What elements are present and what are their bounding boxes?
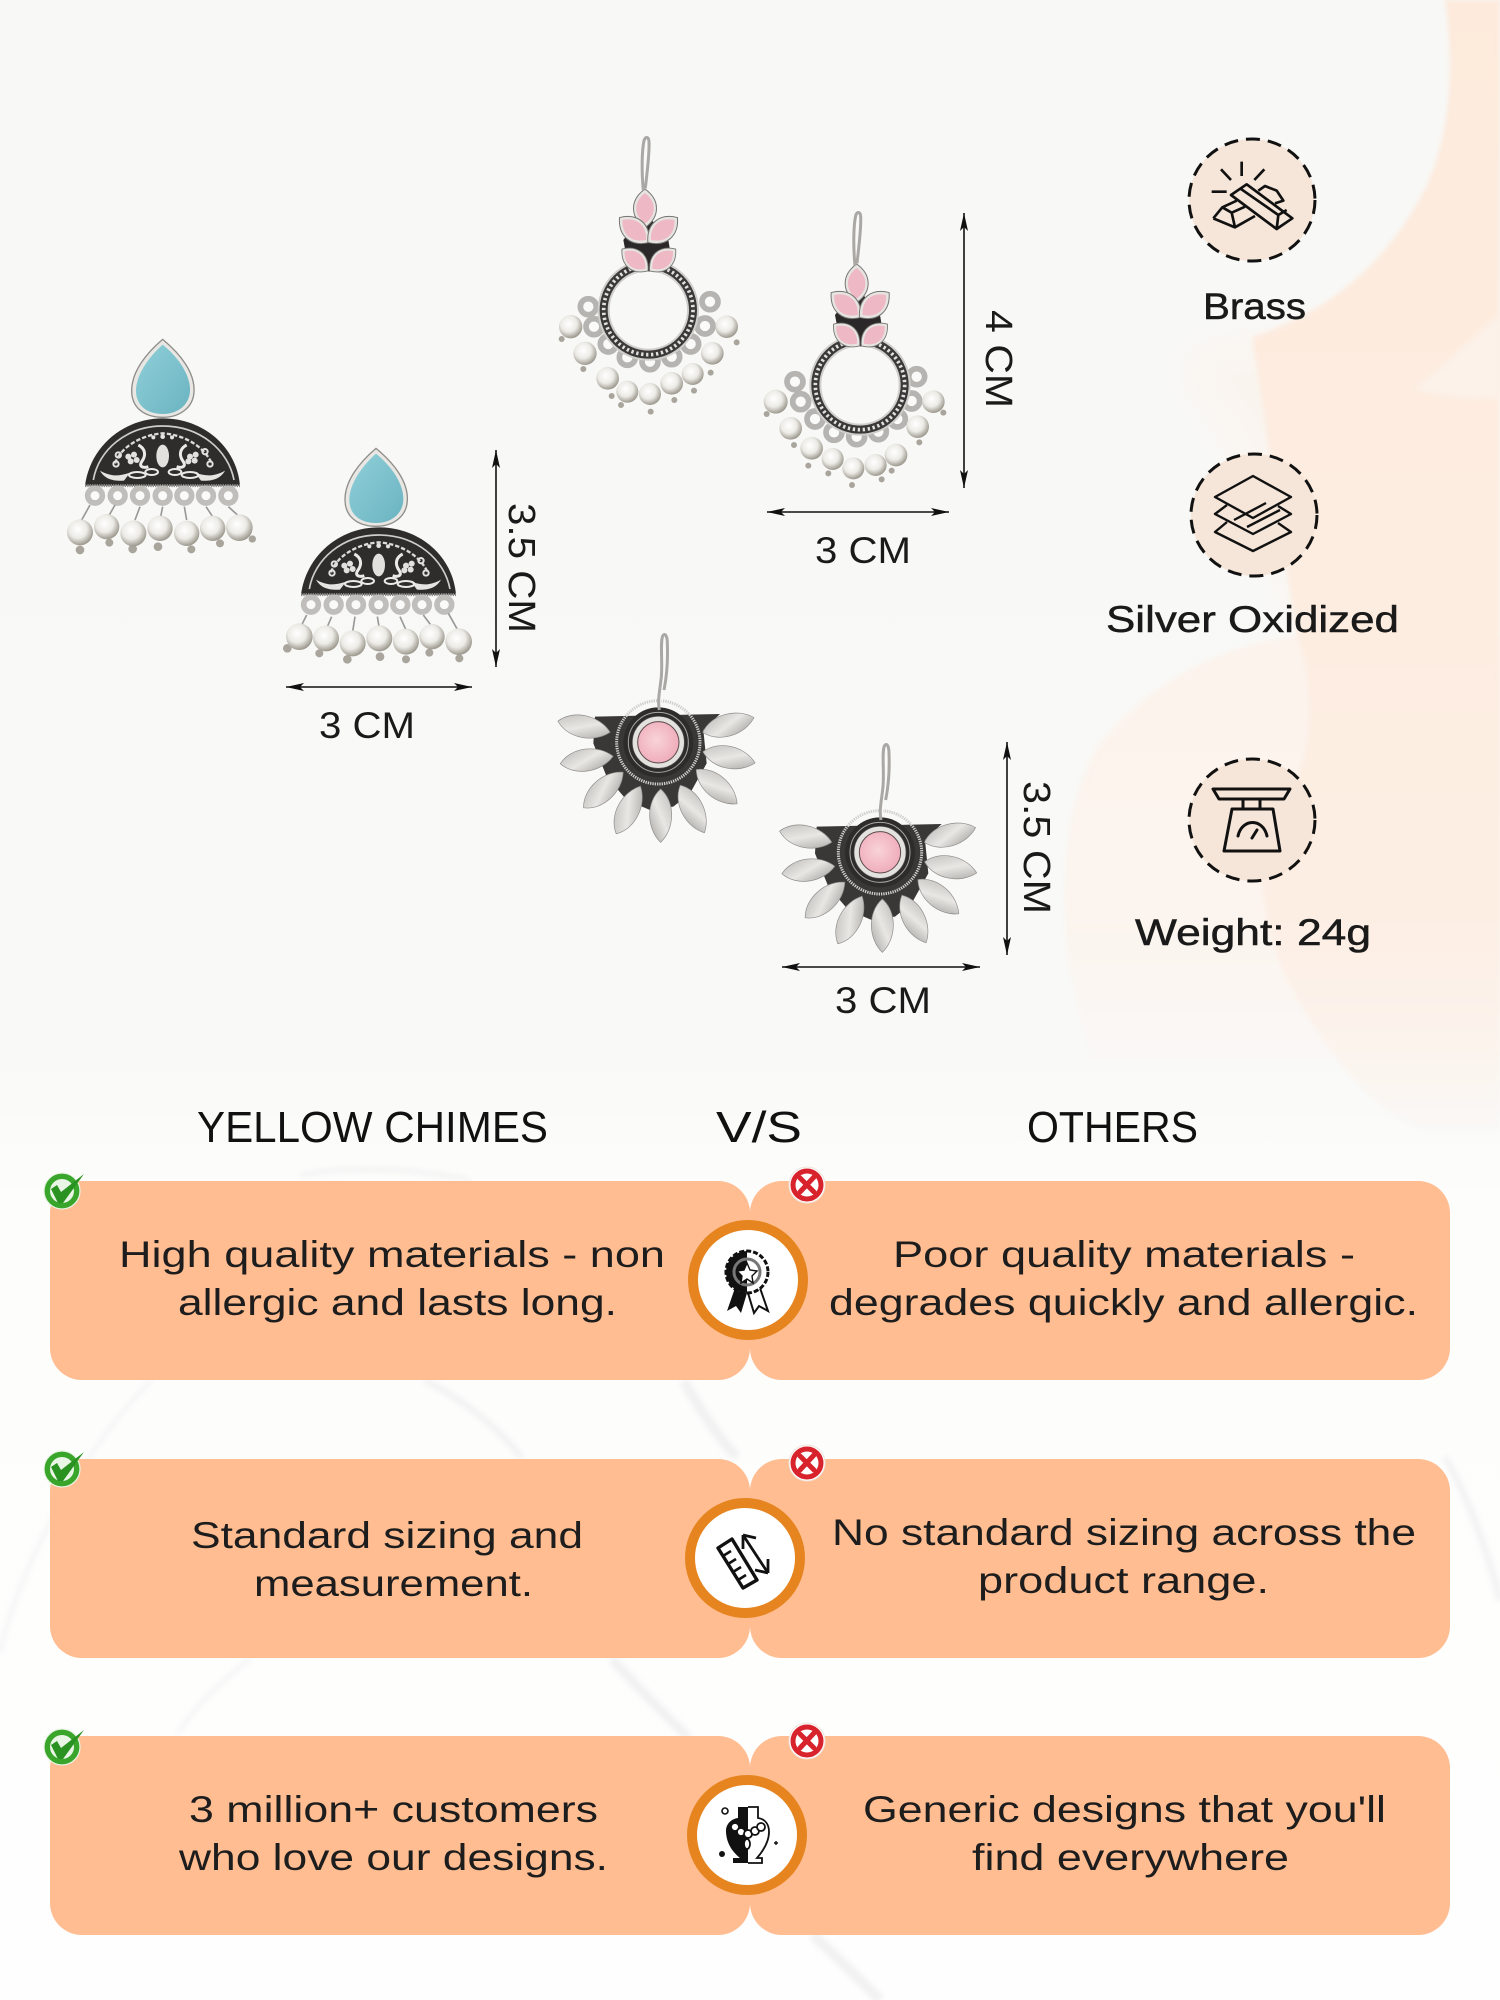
chandbali left: [559, 137, 740, 415]
dimensions: fan: 3.5 CM: [1015, 781, 1057, 914]
panel: yellow chimes quality: High quality materials - non: [119, 1234, 665, 1275]
dimensions: chandbali: [767, 213, 1019, 571]
icon: cross: [789, 1445, 825, 1481]
spec: weight: [1135, 759, 1371, 953]
icon: necklace bust: [692, 1780, 802, 1890]
earring pair: blue drop jhumka: [67, 339, 472, 664]
dimensions: chandbali: 3 CM: [815, 530, 911, 571]
comparison row 1: [44, 1167, 1450, 1380]
panel: others quality: Poor quality materials -: [893, 1234, 1355, 1275]
panel: yellow chimes designs: who love our designs.: [178, 1837, 608, 1878]
dimensions: fan: 3 CM: [835, 980, 931, 1021]
comparison row 2: [44, 1445, 1450, 1658]
icon: medal badge: [693, 1225, 803, 1335]
icon: kitchen scale: [1213, 789, 1290, 851]
panel: others sizing: No standard sizing across the: [832, 1512, 1416, 1553]
panel: yellow chimes designs: 3 million+ customers: [189, 1789, 598, 1830]
earring pair: pink fan: [556, 635, 979, 952]
panel: others designs: [750, 1736, 1450, 1935]
column headings: OTHERS: [1027, 1103, 1198, 1152]
icon: layers: [1215, 476, 1291, 551]
spec: brass: [1189, 139, 1315, 327]
panel: yellow chimes designs: [50, 1736, 750, 1935]
column headings: [197, 1103, 1198, 1152]
spec: silver oxidized: Silver Oxidized: [1106, 599, 1399, 640]
spec: weight: Weight: 24g: [1135, 912, 1371, 953]
panel: others quality: [750, 1181, 1450, 1380]
dimensions: jhumka: 3.5 CM: [500, 503, 542, 633]
panel: others quality: degrades quickly and allergic.: [829, 1282, 1418, 1323]
panel: yellow chimes sizing: Standard sizing and: [191, 1515, 583, 1556]
dimensions: fan: [782, 742, 1057, 1021]
icon: cross: [789, 1723, 825, 1759]
icon: check: [44, 1729, 84, 1765]
earring pair: pink chandbali: [559, 137, 946, 488]
dimensions: jhumka: 3 CM: [319, 705, 415, 746]
column headings: V/S: [716, 1103, 802, 1152]
comparison row 3: [44, 1723, 1450, 1935]
icon: check: [44, 1451, 84, 1487]
spec: brass: Brass: [1203, 286, 1306, 327]
panel: others sizing: [750, 1459, 1450, 1658]
panel: yellow chimes sizing: [50, 1459, 750, 1658]
dimensions: jhumka: [286, 450, 542, 746]
panel: yellow chimes quality: [50, 1181, 750, 1380]
jhumka right: [283, 448, 472, 664]
panel: others sizing: product range.: [978, 1560, 1269, 1601]
jhumka left: [67, 339, 256, 554]
icon: check: [44, 1173, 84, 1209]
spec: silver oxidized: [1106, 454, 1399, 640]
icon: gold bars: [1212, 162, 1292, 229]
panel: yellow chimes quality: allergic and lasts long.: [178, 1282, 617, 1323]
chandbali right: [764, 212, 946, 488]
icon: ruler and arrow: [690, 1503, 800, 1613]
panel: others designs: find everywhere: [972, 1837, 1289, 1878]
panel: yellow chimes sizing: measurement.: [254, 1563, 533, 1604]
fan left: [556, 635, 757, 842]
panel: others designs: Generic designs that you'll: [863, 1789, 1386, 1830]
icon: cross: [789, 1167, 825, 1203]
fan right: [777, 745, 979, 952]
dimensions: chandbali: 4 CM: [977, 310, 1019, 408]
column headings: YELLOW CHIMES: [197, 1103, 548, 1152]
